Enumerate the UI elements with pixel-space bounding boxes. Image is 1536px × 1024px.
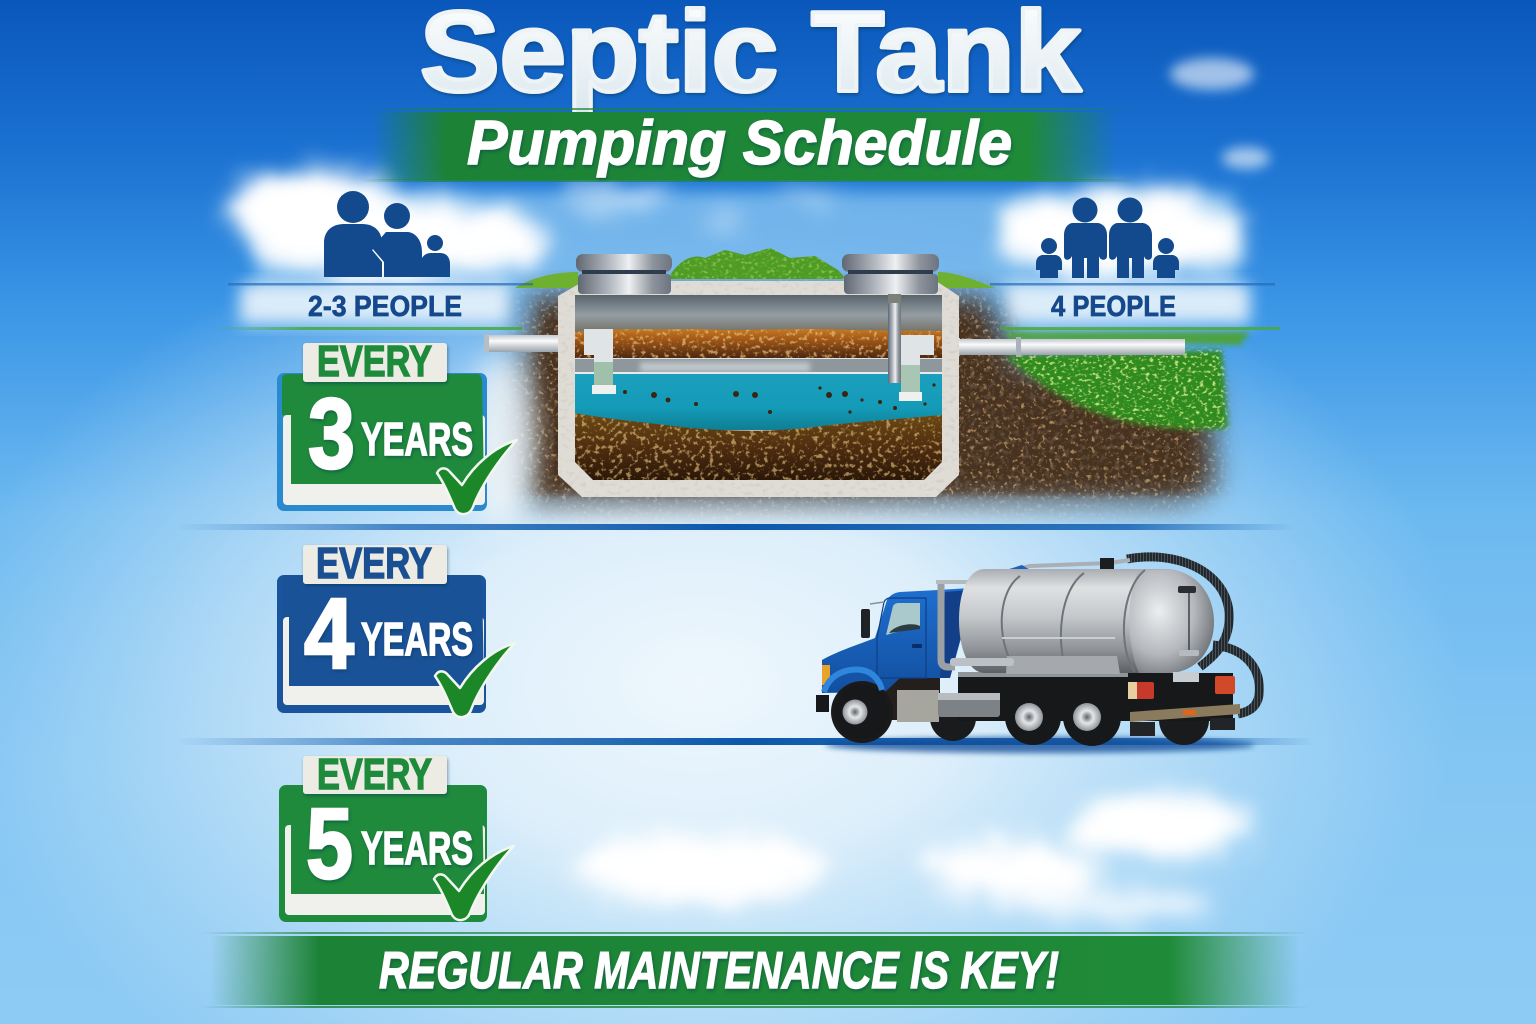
footer banner: REGULAR MAINTENANCE IS KEY! xyxy=(379,942,1059,1000)
cab door outline xyxy=(877,598,926,678)
concrete shell xyxy=(558,281,959,497)
badge: every 3 years xyxy=(277,337,517,514)
access lid: right xyxy=(842,254,939,294)
exhaust xyxy=(941,583,955,667)
label: 2-3 people: 2-3 PEOPLE xyxy=(308,291,462,323)
wheels xyxy=(835,685,889,739)
cab xyxy=(822,588,970,693)
section divider 1 xyxy=(175,524,1295,530)
chassis xyxy=(958,673,1233,721)
badge: every 3 years: YEARS xyxy=(361,413,473,465)
badge: every 3 years: 3 xyxy=(308,378,355,490)
grass on surface xyxy=(515,248,1270,445)
wheel well and fender xyxy=(831,681,893,743)
cab window xyxy=(886,603,920,635)
side shelf and rails xyxy=(1006,656,1120,674)
interior xyxy=(575,295,942,480)
section divider 2 xyxy=(175,738,1315,745)
badge: every 4 years xyxy=(277,539,515,717)
badge: every 5 years: 5 xyxy=(306,788,353,900)
rear lights and plate xyxy=(1128,682,1154,699)
access lid: left xyxy=(576,254,672,294)
badge: every 4 years: 4 xyxy=(304,578,354,690)
badge: every 3 years: EVERY xyxy=(317,337,432,386)
vacuum truck xyxy=(816,557,1259,753)
badge: every 5 years: YEARS xyxy=(361,822,473,874)
water layer xyxy=(575,374,942,430)
headlight and bumper xyxy=(822,665,830,685)
ground shadow xyxy=(825,737,1255,753)
hoses xyxy=(1127,557,1229,667)
scum layer xyxy=(575,329,942,358)
haze beside badge xyxy=(466,355,534,525)
silver tank xyxy=(959,569,1214,673)
sludge layer xyxy=(575,413,942,480)
inlet and outlet pipes xyxy=(484,334,1185,357)
vertical vent pipe xyxy=(888,290,901,383)
right baffle xyxy=(901,335,934,392)
left baffle xyxy=(584,329,613,385)
icon: family of 2-3 people xyxy=(324,191,450,277)
sky strip behind tank scene xyxy=(230,167,1250,324)
clouds: lower sky xyxy=(570,791,1252,923)
badge: every 5 years xyxy=(279,750,514,922)
mirror and door handle xyxy=(861,609,870,638)
subtitle banner: Pumping Schedule xyxy=(467,109,1012,178)
step and fuel tank xyxy=(880,678,940,720)
rear bumper xyxy=(1130,704,1240,722)
badge: every 4 years: EVERY xyxy=(316,539,432,588)
septic tank cross-section xyxy=(558,281,959,497)
hidden far wheels xyxy=(930,695,976,741)
clouds: upper right xyxy=(1170,58,1270,169)
label: 4 people: 4 PEOPLE xyxy=(1051,291,1176,323)
icon: family of 4 people xyxy=(1036,198,1179,278)
soil ground behind tank xyxy=(500,272,1238,524)
badge: every 4 years: YEARS xyxy=(361,613,473,665)
subtitle banner xyxy=(360,108,1140,182)
divider lines at household labels xyxy=(212,283,1280,330)
badge: every 5 years: EVERY xyxy=(317,750,432,799)
top rail xyxy=(1000,560,1130,573)
footer banner xyxy=(200,932,1310,1008)
